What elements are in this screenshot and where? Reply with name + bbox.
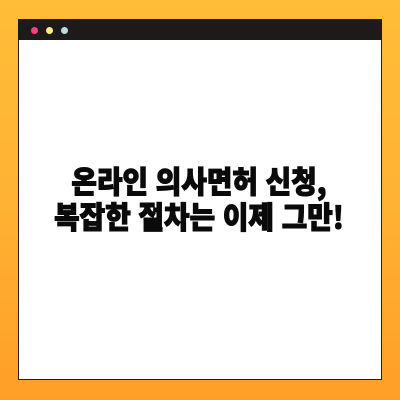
icon: yellow dot (46, 27, 52, 34)
window title bar (18, 19, 382, 40)
icon: pink dot (30, 27, 38, 34)
title: 온라인 의사면허 신청, (71, 157, 327, 202)
title (54, 157, 344, 238)
icon: pale blue dot (60, 27, 68, 34)
title: 복잡한 절차는 이제 그만! (54, 193, 344, 238)
